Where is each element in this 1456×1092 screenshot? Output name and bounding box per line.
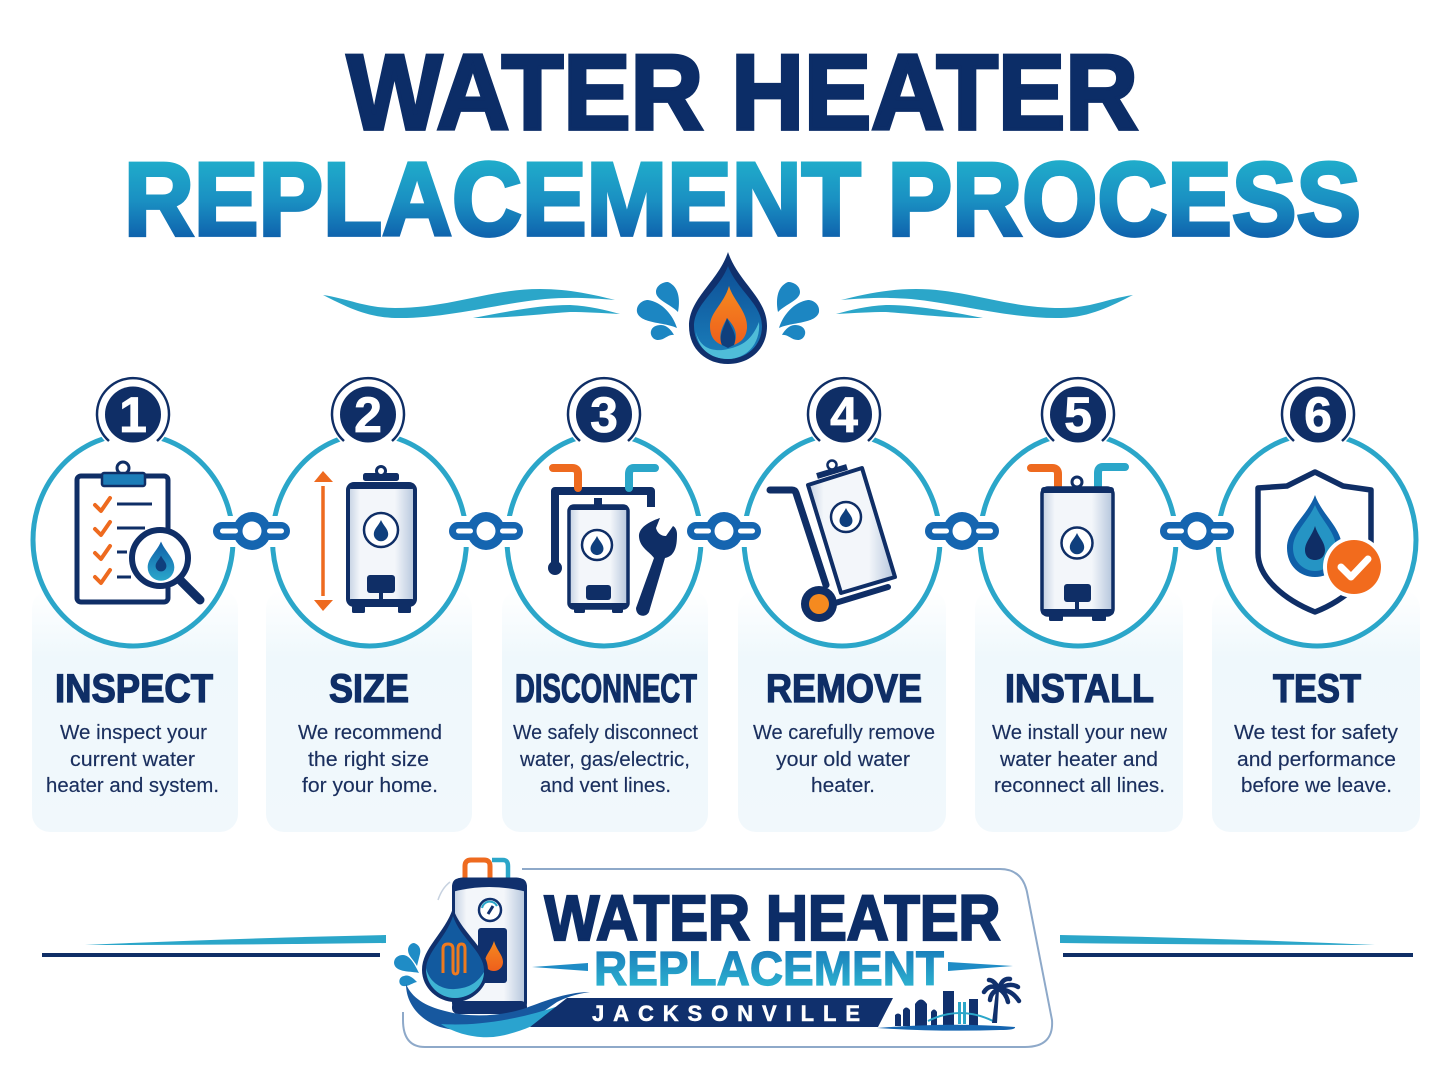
logo plaque	[403, 869, 1052, 1047]
text: disconnect description	[513, 721, 698, 797]
text: inspect description: We inspect your	[60, 721, 207, 744]
text: install description: We install your new	[992, 721, 1167, 744]
icon: disconnect pipes, tank and wrench	[548, 468, 677, 616]
number badge 4: 4	[830, 387, 858, 443]
text: test description: and performance	[1237, 748, 1396, 771]
logo splash	[394, 943, 420, 986]
icon: tank with height arrow	[314, 466, 415, 613]
text: remove description: We carefully remove	[753, 721, 935, 744]
footer rule: left	[42, 935, 386, 957]
text: test description: before we leave.	[1241, 774, 1392, 797]
text: test description	[1234, 721, 1399, 797]
panel: inspect card	[32, 590, 238, 832]
number badge 4	[805, 375, 883, 453]
heading: size: SIZE	[329, 667, 409, 711]
text: inspect description: heater and system.	[46, 774, 219, 797]
number badge 2	[329, 375, 407, 453]
title: WATER HEATER	[347, 32, 1138, 152]
number badge 2: 2	[354, 387, 382, 443]
logo subheading: REPLACEMENT	[594, 943, 944, 996]
connector 4-5	[910, 512, 1014, 550]
number badge 5	[1039, 375, 1117, 453]
logo banner: JACKSONVILLE	[592, 1001, 860, 1026]
panel: install card	[975, 590, 1183, 832]
connector 2-3	[434, 512, 538, 550]
panel: disconnect card	[502, 590, 708, 832]
panel: remove card	[738, 590, 946, 832]
text: install description	[992, 721, 1167, 797]
connector 1-2	[200, 512, 304, 550]
step rings	[33, 434, 1416, 646]
text: size description: We recommend	[298, 721, 442, 744]
heading: inspect: INSPECT	[55, 667, 213, 711]
panel: size card	[266, 590, 472, 832]
number badge 1: 1	[119, 387, 147, 443]
text: disconnect description: We safely disconnect	[513, 721, 698, 744]
heading: test: TEST	[1273, 667, 1361, 711]
text: install description: reconnect all lines.	[994, 774, 1165, 797]
icon: clipboard with magnifier	[77, 462, 200, 602]
number badge 1	[94, 375, 172, 453]
logo drop	[422, 908, 488, 1002]
text: size description: for your home.	[302, 774, 438, 797]
text: remove description: your old water	[776, 748, 910, 771]
text: remove description: heater.	[811, 774, 875, 797]
text: test description: We test for safety	[1234, 721, 1399, 744]
text: remove description	[753, 721, 935, 797]
text: disconnect description: and vent lines.	[540, 774, 671, 797]
logo heater	[438, 860, 527, 1014]
text: inspect description: current water	[70, 748, 195, 771]
heading: remove: REMOVE	[766, 667, 922, 711]
panel: test card	[1212, 590, 1420, 832]
connector 3-4	[671, 512, 775, 550]
number badge 3	[565, 375, 643, 453]
logo skyline	[877, 979, 1019, 1031]
number badge 6	[1279, 375, 1357, 453]
heading: disconnect: DISCONNECT	[515, 667, 697, 711]
icon: tank on hand truck	[770, 460, 895, 622]
title: REPLACEMENT PROCESS	[124, 142, 1361, 258]
logo: water heater replacement jacksonville	[394, 860, 1052, 1047]
connector 5-6	[1145, 512, 1249, 550]
logo heading: WATER HEATER	[544, 882, 1000, 954]
number badge 5: 5	[1064, 387, 1092, 443]
divider: water drop with flame and waves	[323, 252, 1133, 364]
title	[124, 32, 1361, 258]
logo banner	[530, 998, 893, 1027]
number badge 6: 6	[1304, 387, 1332, 443]
text: disconnect description: water, gas/electric,	[519, 748, 690, 771]
text: inspect description	[46, 721, 219, 797]
icon: shield with drop and check	[1258, 472, 1385, 612]
number badge 3: 3	[590, 387, 618, 443]
text: size description	[298, 721, 442, 797]
text: size description: the right size	[308, 748, 429, 771]
logo sub rules	[532, 962, 1013, 971]
logo wave highlight	[441, 1003, 567, 1037]
text: install description: water heater and	[999, 748, 1158, 771]
footer rule: right	[1060, 935, 1413, 957]
heading: install: INSTALL	[1005, 667, 1154, 711]
logo wave	[406, 984, 590, 1031]
icon: new tank with pipes	[1031, 467, 1125, 621]
